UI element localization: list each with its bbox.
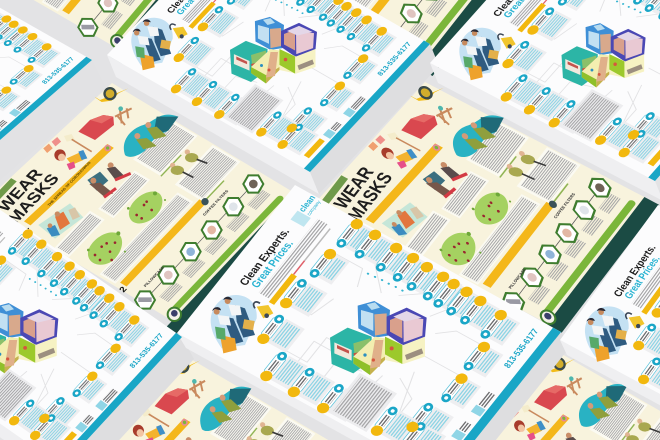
- icon: isometric house top right: [561, 23, 646, 87]
- icon: cleaning team top centre: [131, 18, 188, 70]
- label: green tag: [0, 178, 17, 199]
- number 1: 1: [19, 224, 31, 233]
- icon: isometric house bottom left: [0, 303, 58, 373]
- label: green tag: [321, 175, 348, 205]
- icon: cleaning team top right: [459, 28, 516, 80]
- panel: white flyer top right: [430, 0, 660, 181]
- icon: isometric house top centre: [230, 17, 317, 83]
- panel: white flyer bottom right: [560, 205, 660, 394]
- panel: white flyer top centre: [107, 0, 431, 172]
- caption: coffee filters: COFFEE FILTERS: [552, 192, 577, 219]
- heading: great prices: Great Prices.: [250, 239, 297, 290]
- icon: cleaning team centre: [211, 295, 273, 353]
- phone number: 813-535-6177: [127, 331, 165, 370]
- panel: white flyer upper left: [0, 8, 92, 140]
- panel: yellow flyer left WEAR MASKS: [0, 83, 290, 334]
- panel: yellow flyer centre right WEAR MASKS: [320, 82, 659, 340]
- panel: yellow flyer top left: [34, 0, 158, 63]
- heading: WEAR MASKS: MASKS: [4, 171, 63, 227]
- heading: WEAR MASKS: WEAR: [329, 164, 378, 212]
- icon: cleaning team bottom right: [585, 306, 645, 362]
- phone number: 813-535-6177: [41, 56, 77, 85]
- caption: pillowcase: PILLOWCASE: [142, 265, 166, 288]
- panel: white flyer centre: [177, 184, 562, 440]
- number 2: 2: [117, 285, 129, 294]
- panel: yellow flyer bottom right: [496, 355, 660, 440]
- phone number: 813-535-6177: [501, 327, 541, 370]
- icon: isometric house centre: [330, 301, 427, 375]
- heading: clean experts: Clean Experts.: [612, 243, 659, 299]
- heading: clean experts: Clean Experts.: [238, 227, 293, 288]
- caption: section bar one: THE SPREAD OF CORONAVIRUS: [47, 161, 92, 207]
- panel: yellow flyer top centre: [354, 0, 486, 76]
- logo: company: [307, 200, 323, 217]
- logo: [290, 196, 321, 227]
- logo: clean: [296, 193, 318, 214]
- panel: yellow flyer bottom left: [120, 360, 328, 440]
- phone number: 813-535-6177: [377, 41, 413, 77]
- heading: WEAR MASKS: MASKS: [342, 169, 397, 224]
- caption: coffee filters: COFFEE FILTERS: [201, 189, 230, 217]
- caption: pillowcase: PILLOWCASE: [507, 267, 527, 290]
